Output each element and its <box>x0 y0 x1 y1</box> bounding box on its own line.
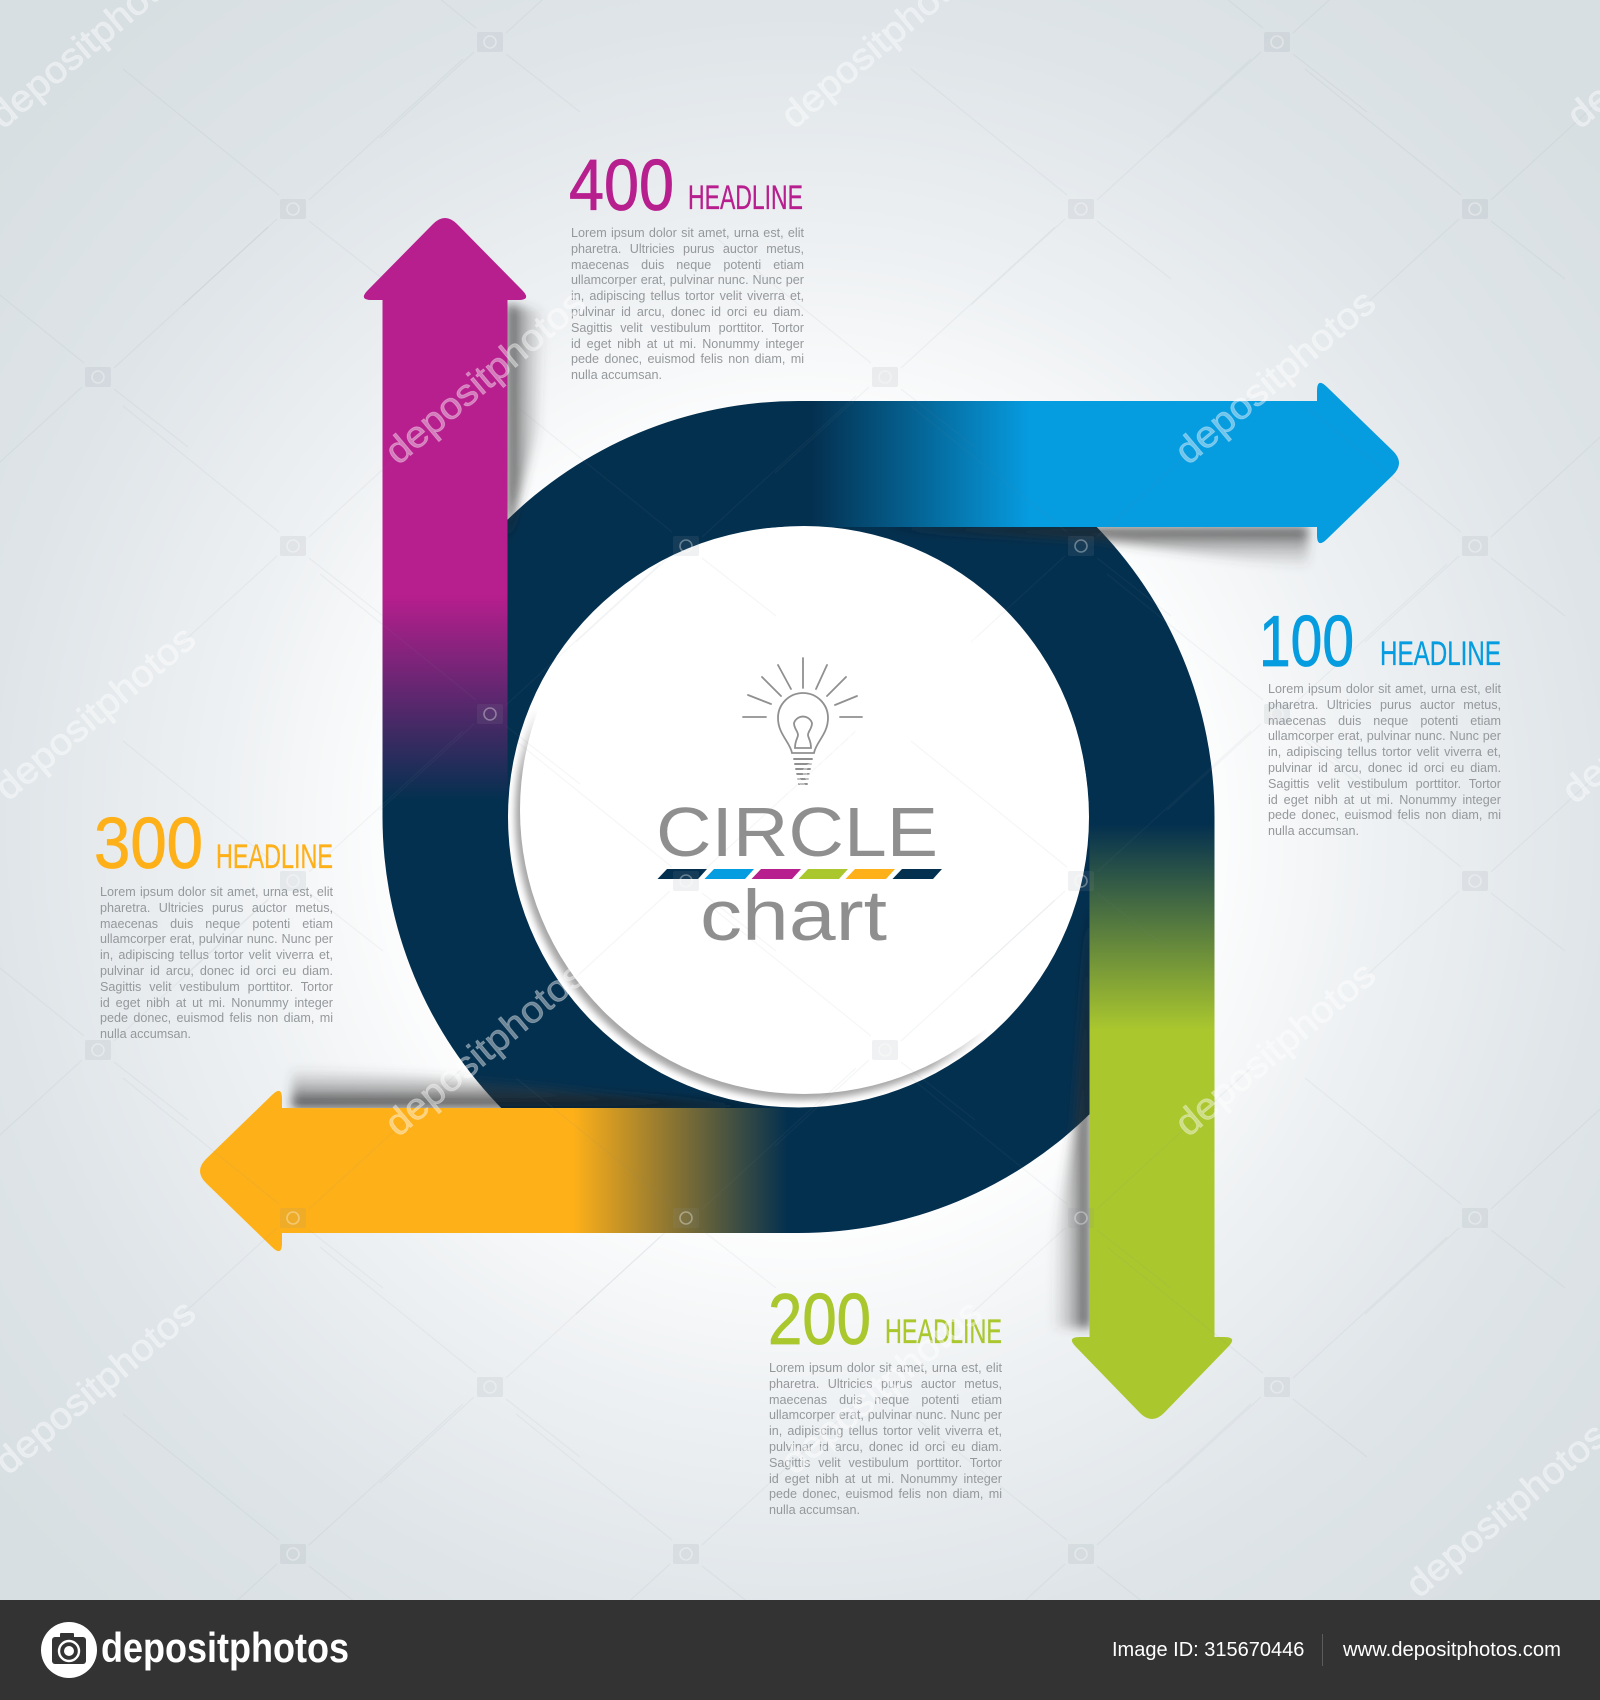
navy ring <box>382 401 1214 1233</box>
text block: 400: pulvinar id arcu, donec id orci eu diam. <box>571 305 804 319</box>
watermark text: depositphotos <box>1398 1414 1600 1605</box>
colour stripes <box>658 869 942 879</box>
text block: 400: pharetra. Ultricies purus auctor metus, <box>571 242 804 256</box>
text block: 300: pulvinar id arcu, donec id orci eu diam. <box>100 964 333 978</box>
heading: 100 headline <box>1259 602 1501 682</box>
text block: 100: Lorem ipsum dolor sit amet, urna est, elit <box>1268 682 1501 696</box>
text block: 100: pharetra. Ultricies purus auctor metus, <box>1268 698 1501 712</box>
arrow: green down <box>1072 817 1232 1419</box>
text block: 100 <box>1268 682 1501 838</box>
footer logo text: depositphotos <box>101 1624 349 1671</box>
footer website: www.depositphotos.com <box>1342 1639 1561 1661</box>
text block: 200: ullamcorper erat, pulvinar nunc. Nunc per <box>769 1408 1002 1422</box>
text block: 400: maecenas duis neque potenti etiam <box>571 258 804 272</box>
text block: 400: Lorem ipsum dolor sit amet, urna est, elit <box>571 226 804 240</box>
text block: 400: in, adipiscing tellus tortor velit viverra et, <box>571 289 804 303</box>
text block: 300: maecenas duis neque potenti etiam <box>100 917 333 931</box>
text block: 200: id eget nibh at ut mi. Nonummy integer <box>769 1472 1002 1486</box>
text block: 400: ullamcorper erat, pulvinar nunc. Nunc per <box>571 273 804 287</box>
text block: 400: pede donec, euismod felis non diam, mi <box>571 352 804 366</box>
icon: light bulb <box>743 658 862 784</box>
arrow: pink up <box>364 218 526 817</box>
text block: 300 <box>100 885 333 1041</box>
text block: 200: pede donec, euismod felis non diam, mi <box>769 1487 1002 1501</box>
watermark text: depositphotos <box>773 617 989 808</box>
text block: 200: Lorem ipsum dolor sit amet, urna est, elit <box>769 1361 1002 1375</box>
text block: 200: Sagittis velit vestibulum porttitor. Tortor <box>769 1456 1002 1470</box>
watermark text: depositphotos <box>773 1291 989 1482</box>
text block: 300: Lorem ipsum dolor sit amet, urna est, elit <box>100 885 333 899</box>
centre white circle <box>508 526 1089 1108</box>
text block: 400: Sagittis velit vestibulum porttitor. Tortor <box>571 321 804 335</box>
watermark text: depositphotos <box>1167 281 1383 472</box>
heading: 300 headline: HEADLINE <box>216 838 333 876</box>
text block: 300: Sagittis velit vestibulum porttitor. Tortor <box>100 980 333 994</box>
text block: 300: ullamcorper erat, pulvinar nunc. Nunc per <box>100 932 333 946</box>
text block: 100: maecenas duis neque potenti etiam <box>1268 714 1501 728</box>
heading: 100 headline: 100 <box>1259 602 1354 682</box>
watermark text: depositphotos <box>1167 953 1383 1144</box>
text block: 100: ullamcorper erat, pulvinar nunc. Nunc per <box>1268 729 1501 743</box>
text block: 100: nulla accumsan. <box>1268 824 1359 838</box>
text block: 300: id eget nibh at ut mi. Nonummy integer <box>100 996 333 1010</box>
text block: 100: pulvinar id arcu, donec id orci eu diam. <box>1268 761 1501 775</box>
text block: 400 <box>571 226 804 382</box>
text block: 400: id eget nibh at ut mi. Nonummy integer <box>571 337 804 351</box>
text block: 200: pulvinar id arcu, donec id orci eu diam. <box>769 1440 1002 1454</box>
heading: 200 headline: 200 <box>768 1280 871 1360</box>
watermark text: depositphotos <box>377 281 593 472</box>
main graphic <box>96 158 1500 1419</box>
text block: 200: in, adipiscing tellus tortor velit viverra et, <box>769 1424 1002 1438</box>
heading: 400 headline: HEADLINE <box>688 179 803 217</box>
text block: 200: pharetra. Ultricies purus auctor metus, <box>769 1377 1002 1391</box>
text block: 200: nulla accumsan. <box>769 1503 860 1517</box>
arrow shadows <box>292 304 1308 1328</box>
arrow: orange left <box>200 1091 800 1251</box>
subtitle: chart: chart <box>700 877 887 956</box>
text block: 100: in, adipiscing tellus tortor velit viverra et, <box>1268 745 1501 759</box>
text block: 200: maecenas duis neque potenti etiam <box>769 1393 1002 1407</box>
heading: 200 headline: HEADLINE <box>885 1313 1002 1351</box>
heading: 300 headline <box>94 804 333 884</box>
heading: 300 headline: 300 <box>94 804 203 884</box>
heading: 100 headline: HEADLINE <box>1380 635 1501 673</box>
icon: footer logo <box>41 1622 97 1678</box>
footer image id: Image ID: 315670446 <box>1112 1639 1304 1661</box>
footer bar <box>0 1600 1600 1700</box>
text block: 300: in, adipiscing tellus tortor velit viverra et, <box>100 948 333 962</box>
title: CIRCLE: CIRCLE <box>656 793 938 871</box>
heading: 400 headline: 400 <box>569 146 674 226</box>
text block: 100: id eget nibh at ut mi. Nonummy integer <box>1268 793 1501 807</box>
text block: 300: pharetra. Ultricies purus auctor metus, <box>100 901 333 915</box>
text block: 100: Sagittis velit vestibulum porttitor. Tortor <box>1268 777 1501 791</box>
text block: 400: nulla accumsan. <box>571 368 662 382</box>
text block: 300: nulla accumsan. <box>100 1027 191 1041</box>
watermark text: depositphotos <box>377 953 593 1144</box>
text block: 300: pede donec, euismod felis non diam, mi <box>100 1011 333 1025</box>
arrow: blue right <box>798 383 1399 543</box>
heading: 400 headline <box>569 146 803 226</box>
heading: 200 headline <box>768 1280 1002 1360</box>
text block: 200 <box>769 1361 1002 1517</box>
text block: 100: pede donec, euismod felis non diam, mi <box>1268 808 1501 822</box>
